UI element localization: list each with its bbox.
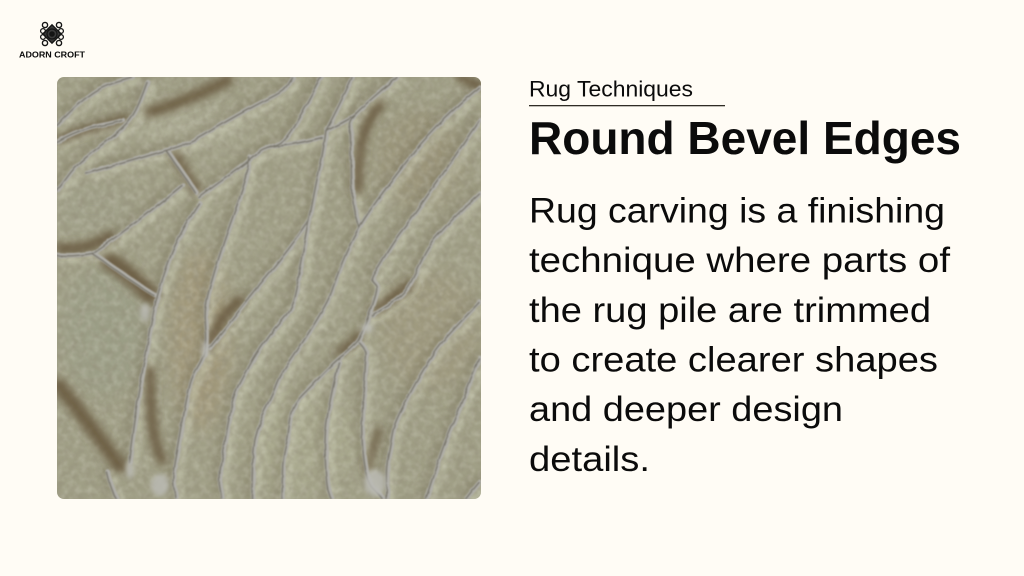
brown shadows beside the carved edges [58, 77, 480, 468]
broad tonal variation of the pile [142, 110, 456, 474]
body text: to create clearer shapes [529, 340, 938, 380]
pale highlight rim along the lobes [62, 81, 484, 502]
pile grain [57, 77, 481, 499]
logo wordmark: ADORN CROFT [19, 50, 86, 60]
body text: Rug carving is a finishing [529, 192, 945, 230]
body text: details. [529, 440, 650, 479]
carved grooves [57, 77, 480, 498]
exposed base at groove junctions [126, 303, 386, 496]
body text: and deeper design [529, 390, 843, 429]
carved rug photo [54, 74, 484, 502]
subheading: Rug Techniques [529, 76, 693, 102]
logo: Adorn Croft [19, 22, 86, 59]
body text [529, 192, 950, 479]
body text: the rug pile are trimmed [529, 291, 931, 330]
dark bevel on one side of each groove [54, 74, 476, 495]
icon: logo mark [41, 22, 63, 46]
body text: technique where parts of [529, 241, 950, 280]
title: Round Bevel Edges [529, 112, 961, 164]
heading underline [529, 105, 725, 106]
